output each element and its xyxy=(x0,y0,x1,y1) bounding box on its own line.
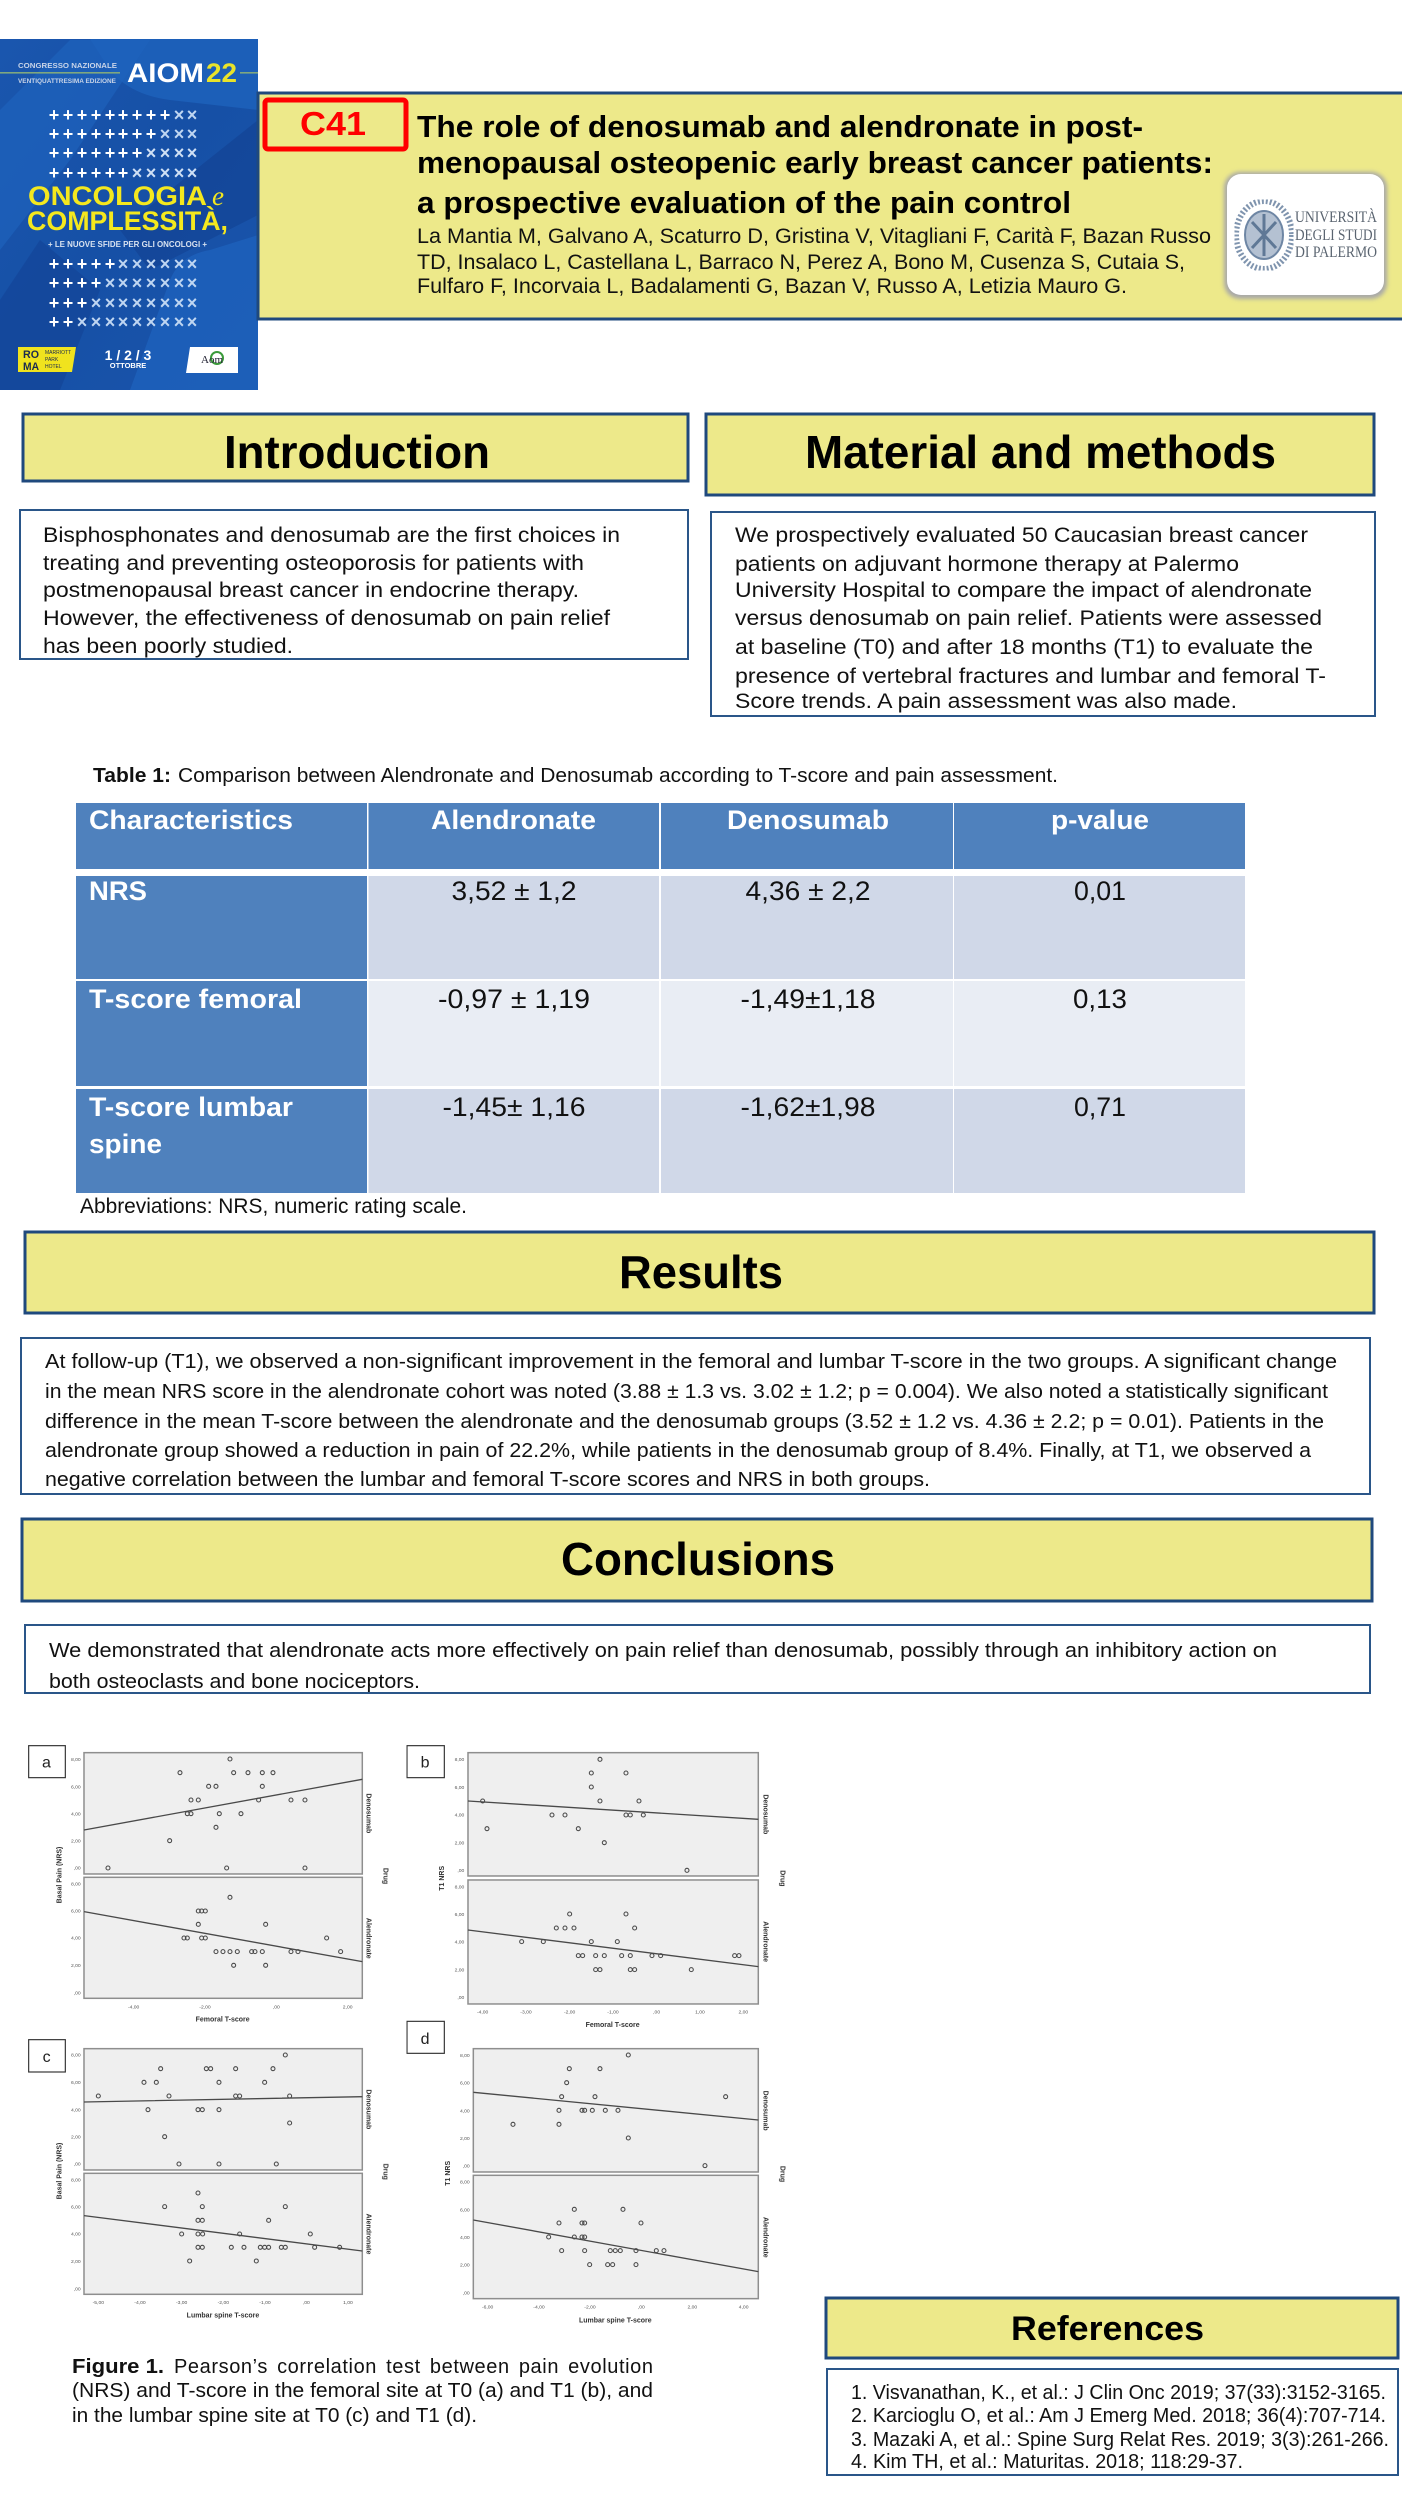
venue badge: PARK xyxy=(45,357,59,363)
chart d: lumbar spine T-score vs T1 NRS: Alendronate xyxy=(762,2217,769,2258)
panel: results text: negative correlation between the lumbar and femoral T-score scores and NRS in both groups. xyxy=(45,1469,930,1491)
panel label a: a xyxy=(42,1754,51,1771)
AIOM22 logo: AIOM xyxy=(127,58,204,88)
chart b: femoral T-score vs T1 NRS xyxy=(407,1746,786,2029)
row: T-score femoral xyxy=(76,981,1245,1086)
chart b: femoral T-score vs T1 NRS: 4,00 xyxy=(455,1813,465,1819)
chart c: lumbar spine T-score vs basal pain: ,00 xyxy=(74,2286,81,2292)
poster code badge: C41 xyxy=(300,105,366,142)
table header row: Characteristics xyxy=(89,805,293,835)
plus and cross pattern: ××××× xyxy=(132,163,197,183)
chart a: femoral T-score vs basal pain: 2,00 xyxy=(71,1838,81,1844)
panel: introduction text: treating and preventing osteoporosis for patients with xyxy=(43,551,584,575)
figure caption: Figure 1. xyxy=(72,2356,164,2378)
row: NRS: 4,36 ± 2,2 xyxy=(746,876,870,906)
figure caption xyxy=(72,2356,653,2427)
chart b: femoral T-score vs T1 NRS: Denosumab xyxy=(762,1794,769,1834)
authors xyxy=(417,225,1211,298)
chart a: femoral T-score vs basal pain: 6,00 xyxy=(71,1909,81,1915)
row: NRS: 3,52 ± 1,2 xyxy=(452,876,576,906)
chart b: femoral T-score vs T1 NRS: -1,00 xyxy=(607,2009,619,2015)
plus and cross pattern: +++++ xyxy=(49,254,115,274)
panel: conclusions text: We demonstrated that alendronate acts more effectively on pain relief than denosumab, possibly through an inhibitory action on xyxy=(49,1640,1277,1662)
venue badge: MARRIOTT xyxy=(45,350,71,356)
panel: introduction text: postmenopausal breast cancer in endocrine therapy. xyxy=(43,578,579,602)
chart b: femoral T-score vs T1 NRS: ,00 xyxy=(653,2009,660,2015)
chart c: lumbar spine T-score vs basal pain: -3,00 xyxy=(176,2300,188,2306)
dates: OTTOBRE xyxy=(110,361,146,370)
heading: Introduction: Introduction xyxy=(224,426,490,478)
figure caption: Pearson’s correlation test between pain evolution xyxy=(174,2356,653,2378)
venue badge: HOTEL xyxy=(45,364,62,370)
chart d: lumbar spine T-score vs T1 NRS: 4,00 xyxy=(460,2235,470,2241)
plus and cross pattern: +++++++++ xyxy=(49,105,170,125)
chart c: lumbar spine T-score vs basal pain: -4,00 xyxy=(134,2300,146,2306)
heading: Conclusions: Conclusions xyxy=(561,1533,835,1585)
chart b: femoral T-score vs T1 NRS: 8,00 xyxy=(455,1757,465,1763)
chart b: femoral T-score vs T1 NRS: 6,00 xyxy=(455,1785,465,1791)
chart a: femoral T-score vs basal pain: 8,00 xyxy=(71,1757,81,1763)
title: menopausal osteopenic early breast cancer patients: xyxy=(417,145,1213,180)
chart b: femoral T-score vs T1 NRS: 4,00 xyxy=(455,1940,465,1946)
panel: methods text: presence of vertebral fractures and lumbar and femoral T- xyxy=(735,664,1326,688)
chart c: lumbar spine T-score vs basal pain: -2,00 xyxy=(218,2300,229,2306)
dates xyxy=(106,350,151,368)
chart b: femoral T-score vs T1 NRS: Alendronate xyxy=(762,1921,769,1962)
chart d: lumbar spine T-score vs T1 NRS: 4,00 xyxy=(460,2108,470,2114)
chart d: lumbar spine T-score vs T1 NRS: ,00 xyxy=(463,2290,470,2296)
panel label b: b xyxy=(421,1754,430,1771)
panel: conclusions text xyxy=(25,1625,1370,1693)
panel label b xyxy=(407,1746,444,1778)
panel: results text xyxy=(21,1338,1370,1494)
chart b: femoral T-score vs T1 NRS: T1 NRS xyxy=(439,1866,446,1891)
chart c: lumbar spine T-score vs basal pain: Alendronate xyxy=(364,2214,371,2254)
chart d: lumbar spine T-score vs T1 NRS: ,00 xyxy=(463,2164,470,2170)
chart a: femoral T-score vs basal pain: 4,00 xyxy=(71,1811,81,1817)
plus and cross pattern: ++++++ xyxy=(49,163,128,183)
panel label d xyxy=(407,2021,444,2053)
venue badge: MA xyxy=(23,361,39,373)
row: T-score lumbar spine: T-score lumbar xyxy=(89,1092,294,1122)
panel: results text: in the mean NRS score in the alendronate cohort was noted (3.88 ± 1.3 vs. 3.02 ± 1.2; p = 0.004). We also noted a statistically significant xyxy=(45,1381,1328,1403)
row: NRS: 0,01 xyxy=(1074,876,1126,906)
venue badge: RO xyxy=(23,349,39,361)
plus and cross pattern: ×××××××× xyxy=(91,293,197,313)
chart b: femoral T-score vs T1 NRS: 6,00 xyxy=(455,1912,465,1918)
panel: conclusions text: both osteoclasts and bone nociceptors. xyxy=(49,1671,420,1693)
chart a: femoral T-score vs basal pain: -4,00 xyxy=(128,2004,140,2010)
authors: TD, Insalaco L, Castellana L, Barraco N, Perez A, Bono M, Cusenza S, Cutaia S, xyxy=(417,251,1185,274)
panel label c: c xyxy=(43,2049,51,2066)
congress name: CONGRESSO NAZIONALE xyxy=(18,61,117,70)
plus and cross pattern: ×××× xyxy=(146,143,197,163)
plus and cross pattern xyxy=(49,105,197,332)
chart d: lumbar spine T-score vs T1 NRS: -2,00 xyxy=(584,2304,596,2310)
panel: methods text: at baseline (T0) and after 18 months (T1) to evaluate the xyxy=(735,635,1313,659)
panel: references list: 4. Kim TH, et al.: Maturitas. 2018; 118:29-37. xyxy=(851,2451,1243,2473)
chart a: femoral T-score vs basal pain: Basal Pain (NRS) xyxy=(57,1847,64,1903)
chart d: lumbar spine T-score vs T1 NRS: 6,00 xyxy=(460,2207,470,2213)
chart c: lumbar spine T-score vs basal pain: 4,00 xyxy=(71,2107,81,2113)
university logo: DEGLI STUDI xyxy=(1295,227,1377,244)
chart b: femoral T-score vs T1 NRS: Drug xyxy=(779,1870,786,1886)
row: T-score lumbar spine: -1,45± 1,16 xyxy=(442,1092,586,1122)
table header row: Alendronate xyxy=(431,805,596,835)
panel: references list: 3. Mazaki A, et al.: Spine Surg Relat Res. 2019; 3(3):261-266. xyxy=(851,2429,1389,2451)
table header row: Denosumab xyxy=(727,805,889,835)
panel: methods text: Score trends. A pain assessment was also made. xyxy=(735,689,1237,713)
chart c: lumbar spine T-score vs basal pain: 2,00 xyxy=(71,2134,81,2140)
chart c: lumbar spine T-score vs basal pain: 6,00 xyxy=(71,2205,81,2211)
chart c: lumbar spine T-score vs basal pain: Denosumab xyxy=(364,2089,371,2129)
chart a: femoral T-score vs basal pain: ,00 xyxy=(273,2004,280,2010)
row: T-score femoral: -0,97 ± 1,19 xyxy=(438,984,590,1014)
chart c: lumbar spine T-score vs basal pain: 6,00 xyxy=(71,2080,81,2086)
plus and cross pattern: ××××××× xyxy=(105,273,197,293)
chart b: femoral T-score vs T1 NRS: -2,00 xyxy=(564,2009,576,2015)
table header row: p-value xyxy=(1051,805,1149,835)
chart d: lumbar spine T-score vs T1 NRS: 2,00 xyxy=(687,2304,697,2310)
table caption: Table 1: xyxy=(93,764,171,787)
chart c: lumbar spine T-score vs basal pain: Basal Pain (NRS) xyxy=(57,2143,64,2199)
panel: results text: difference in the mean T-score between the alendronate and the denosumab groups (3.52 ± 1.2 vs. 4.36 ± 2.2; p = 0.01). Patients in the xyxy=(45,1411,1324,1433)
chart b: femoral T-score vs T1 NRS: 2,00 xyxy=(455,1840,465,1846)
panel: introduction text xyxy=(20,510,688,659)
chart a: femoral T-score vs basal pain: Drug xyxy=(382,1868,389,1884)
chart d: lumbar spine T-score vs T1 NRS: 2,00 xyxy=(460,2136,470,2142)
cover title: COMPLESSITÀ, xyxy=(27,205,228,236)
chart d: lumbar spine T-score vs T1 NRS: 4,00 xyxy=(739,2304,749,2310)
chart c: lumbar spine T-score vs basal pain: ,00 xyxy=(303,2300,310,2306)
plus and cross pattern: ++++++++ xyxy=(49,124,156,144)
row: T-score femoral: 0,13 xyxy=(1073,984,1127,1014)
chart a: femoral T-score vs basal pain: Denosumab xyxy=(364,1793,371,1833)
chart b: femoral T-score vs T1 NRS: 1,00 xyxy=(695,2009,705,2015)
edition: VENTIQUATTRESIMA EDIZIONE xyxy=(18,78,117,85)
table abbreviations: Abbreviations: NRS, numeric rating scale. xyxy=(80,1195,467,1218)
chart c: lumbar spine T-score vs basal pain: -1,00 xyxy=(259,2300,271,2306)
heading: Conclusions xyxy=(22,1519,1372,1601)
cover title: e xyxy=(212,181,224,211)
chart c: lumbar spine T-score vs basal pain: ,00 xyxy=(74,2162,81,2168)
chart c: lumbar spine T-score vs basal pain: -5,00 xyxy=(93,2300,104,2306)
chart c: lumbar spine T-score vs basal pain: 8,00 xyxy=(71,2177,81,2183)
panel: methods text xyxy=(711,512,1375,716)
panel: methods text: University Hospital to compare the impact of alendronate xyxy=(735,578,1312,602)
chart d: lumbar spine T-score vs T1 NRS: Lumbar spine T-score xyxy=(579,2317,652,2324)
AIOM society logo: Aom xyxy=(201,354,223,366)
authors: La Mantia M, Galvano A, Scaturro D, Gristina V, Vitagliani F, Carità F, Bazan Russo xyxy=(417,225,1211,248)
chart c: lumbar spine T-score vs basal pain xyxy=(29,2040,389,2320)
row: T-score lumbar spine xyxy=(76,1089,1245,1193)
panel label c xyxy=(29,2040,65,2072)
panel: references list: 2. Karcioglu O, et al.: Am J Emerg Med. 2018; 36(4):707-714. xyxy=(851,2405,1386,2427)
chart d: lumbar spine T-score vs T1 NRS: ,00 xyxy=(638,2304,645,2310)
title xyxy=(417,109,1213,220)
row: NRS xyxy=(76,876,1245,979)
chart c: lumbar spine T-score vs basal pain: 4,00 xyxy=(71,2232,81,2238)
AIOM22 logo xyxy=(128,63,236,82)
university logo: DI PALERMO xyxy=(1295,244,1377,261)
plus and cross pattern: ×× xyxy=(174,105,197,125)
university logo: UNIVERSITÀ xyxy=(1295,207,1377,226)
panel: introduction text: Bisphosphonates and denosumab are the first choices in xyxy=(43,523,620,547)
chart a: femoral T-score vs basal pain: ,00 xyxy=(74,1990,81,1996)
header panel xyxy=(258,93,1402,319)
plus and cross pattern: ++++ xyxy=(49,273,101,293)
chart c: lumbar spine T-score vs basal pain: Drug xyxy=(382,2164,389,2180)
chart a: femoral T-score vs basal pain: ,00 xyxy=(74,1866,81,1872)
cover subtitle: + LE NUOVE SFIDE PER GLI ONCOLOGI + xyxy=(48,240,207,249)
chart d: lumbar spine T-score vs T1 NRS: 8,00 xyxy=(460,2053,470,2059)
chart b: femoral T-score vs T1 NRS: -3,00 xyxy=(520,2009,532,2015)
chart b: femoral T-score vs T1 NRS: 2,00 xyxy=(738,2009,748,2015)
chart b: femoral T-score vs T1 NRS: 2,00 xyxy=(455,1967,465,1973)
title: a prospective evaluation of the pain control xyxy=(417,185,1071,220)
chart c: lumbar spine T-score vs basal pain: 2,00 xyxy=(71,2259,81,2265)
panel: methods text: versus denosumab on pain relief. Patients were assessed xyxy=(735,606,1322,630)
heading: Material and methods: Material and methods xyxy=(805,426,1276,478)
chart b: femoral T-score vs T1 NRS: ,00 xyxy=(457,1868,465,1874)
row: T-score femoral: T-score femoral xyxy=(89,984,302,1014)
row: T-score lumbar spine: 0,71 xyxy=(1074,1092,1126,1122)
panel: methods text: We prospectively evaluated 50 Caucasian breast cancer xyxy=(735,523,1308,547)
table caption: Comparison between Alendronate and Denosumab according to T-score and pain assessment. xyxy=(178,764,1058,787)
row: T-score lumbar spine: -1,62±1,98 xyxy=(740,1092,876,1122)
chart d: lumbar spine T-score vs T1 NRS: 2,00 xyxy=(460,2263,470,2269)
chart a: femoral T-score vs basal pain: 8,00 xyxy=(71,1881,81,1887)
panel label a xyxy=(29,1746,65,1778)
AIOM society logo xyxy=(186,347,238,373)
panel: references list xyxy=(827,2369,1398,2475)
plus and cross pattern: ++ xyxy=(49,312,73,332)
plus and cross pattern: +++ xyxy=(49,293,87,313)
chart d: lumbar spine T-score vs T1 NRS: T1 NRS xyxy=(445,2161,452,2186)
chart a: femoral T-score vs basal pain: -2,00 xyxy=(199,2004,211,2010)
heading: References xyxy=(826,2298,1398,2358)
chart b: femoral T-score vs T1 NRS: Femoral T-score xyxy=(586,2022,640,2029)
plus and cross pattern: +++++++ xyxy=(49,143,142,163)
chart c: lumbar spine T-score vs basal pain: Lumbar spine T-score xyxy=(187,2313,259,2320)
chart d: lumbar spine T-score vs T1 NRS: 8,00 xyxy=(460,2180,470,2186)
chart c: lumbar spine T-score vs basal pain: 1,00 xyxy=(343,2300,353,2306)
plus and cross pattern: ××××××××× xyxy=(77,312,197,332)
panel: methods text: patients on adjuvant hormone therapy at Palermo xyxy=(735,552,1239,576)
heading: Material and methods xyxy=(706,414,1374,495)
chart a: femoral T-score vs basal pain: 6,00 xyxy=(71,1784,81,1790)
panel: references list: 1. Visvanathan, K., et al.: J Clin Onc 2019; 37(33):3152-3165. xyxy=(851,2382,1386,2404)
cover title: ONCOLOGIA xyxy=(28,181,207,211)
chart d: lumbar spine T-score vs T1 NRS: Drug xyxy=(779,2166,786,2182)
chart d: lumbar spine T-score vs T1 NRS: -4,00 xyxy=(533,2304,545,2310)
row: T-score femoral: -1,49±1,18 xyxy=(740,984,876,1014)
plus and cross pattern: ×××××× xyxy=(118,254,197,274)
venue badge xyxy=(18,347,76,373)
congress cover image xyxy=(0,39,258,390)
chart b: femoral T-score vs T1 NRS: -4,00 xyxy=(477,2009,489,2015)
panel: results text: At follow-up (T1), we observed a non-significant improvement in the femoral and lumbar T-score in the two groups. A significant change xyxy=(45,1351,1337,1373)
AIOM22 logo: 22 xyxy=(206,58,237,88)
chart d: lumbar spine T-score vs T1 NRS: 6,00 xyxy=(460,2081,470,2087)
table header row xyxy=(76,803,1245,869)
authors: Fulfaro F, Incorvaia L, Badalamenti G, Bazan V, Russo A, Letizia Mauro G. xyxy=(417,275,1127,298)
plus and cross pattern: ××× xyxy=(160,124,197,144)
panel: introduction text: However, the effectiveness of denosumab on pain relief xyxy=(43,606,610,630)
university logo xyxy=(1224,172,1387,299)
title: The role of denosumab and alendronate in post- xyxy=(417,109,1143,144)
figure caption: in the lumbar spine site at T0 (c) and T1 (d). xyxy=(72,2405,477,2427)
row: NRS: NRS xyxy=(89,876,147,906)
chart b: femoral T-score vs T1 NRS: ,00 xyxy=(457,1995,465,2001)
cover title xyxy=(28,186,226,234)
chart a: femoral T-score vs basal pain: 2,00 xyxy=(71,1963,81,1969)
panel label d: d xyxy=(421,2031,430,2048)
chart b: femoral T-score vs T1 NRS: 8,00 xyxy=(455,1884,465,1890)
chart a: femoral T-score vs basal pain xyxy=(29,1746,389,2023)
heading: Results xyxy=(25,1232,1374,1313)
chart c: lumbar spine T-score vs basal pain: 8,00 xyxy=(71,2053,81,2059)
heading: Results: Results xyxy=(619,1246,783,1298)
chart d: lumbar spine T-score vs T1 NRS xyxy=(407,2021,786,2324)
figure caption: (NRS) and T-score in the femoral site at T0 (a) and T1 (b), and xyxy=(72,2380,653,2402)
panel: results text: alendronate group showed a reduction in pain of 22.2%, while patients in the denosumab group of 8.4%. Finally, at T1, we observed a xyxy=(45,1440,1312,1462)
chart d: lumbar spine T-score vs T1 NRS: -6,00 xyxy=(482,2304,494,2310)
chart a: femoral T-score vs basal pain: 2,00 xyxy=(343,2004,353,2010)
chart a: femoral T-score vs basal pain: Alendronate xyxy=(364,1918,371,1959)
dates: 1 / 2 / 3 xyxy=(105,347,152,363)
poster code badge xyxy=(265,100,406,149)
row: T-score lumbar spine: spine xyxy=(89,1129,162,1159)
heading: Introduction xyxy=(23,414,688,481)
chart a: femoral T-score vs basal pain: Femoral T-score xyxy=(196,2016,250,2023)
heading: References: References xyxy=(1011,2310,1204,2348)
chart a: femoral T-score vs basal pain: 4,00 xyxy=(71,1936,81,1942)
chart d: lumbar spine T-score vs T1 NRS: Denosumab xyxy=(762,2091,769,2131)
panel: introduction text: has been poorly studied. xyxy=(43,634,293,658)
table xyxy=(76,803,1245,1193)
